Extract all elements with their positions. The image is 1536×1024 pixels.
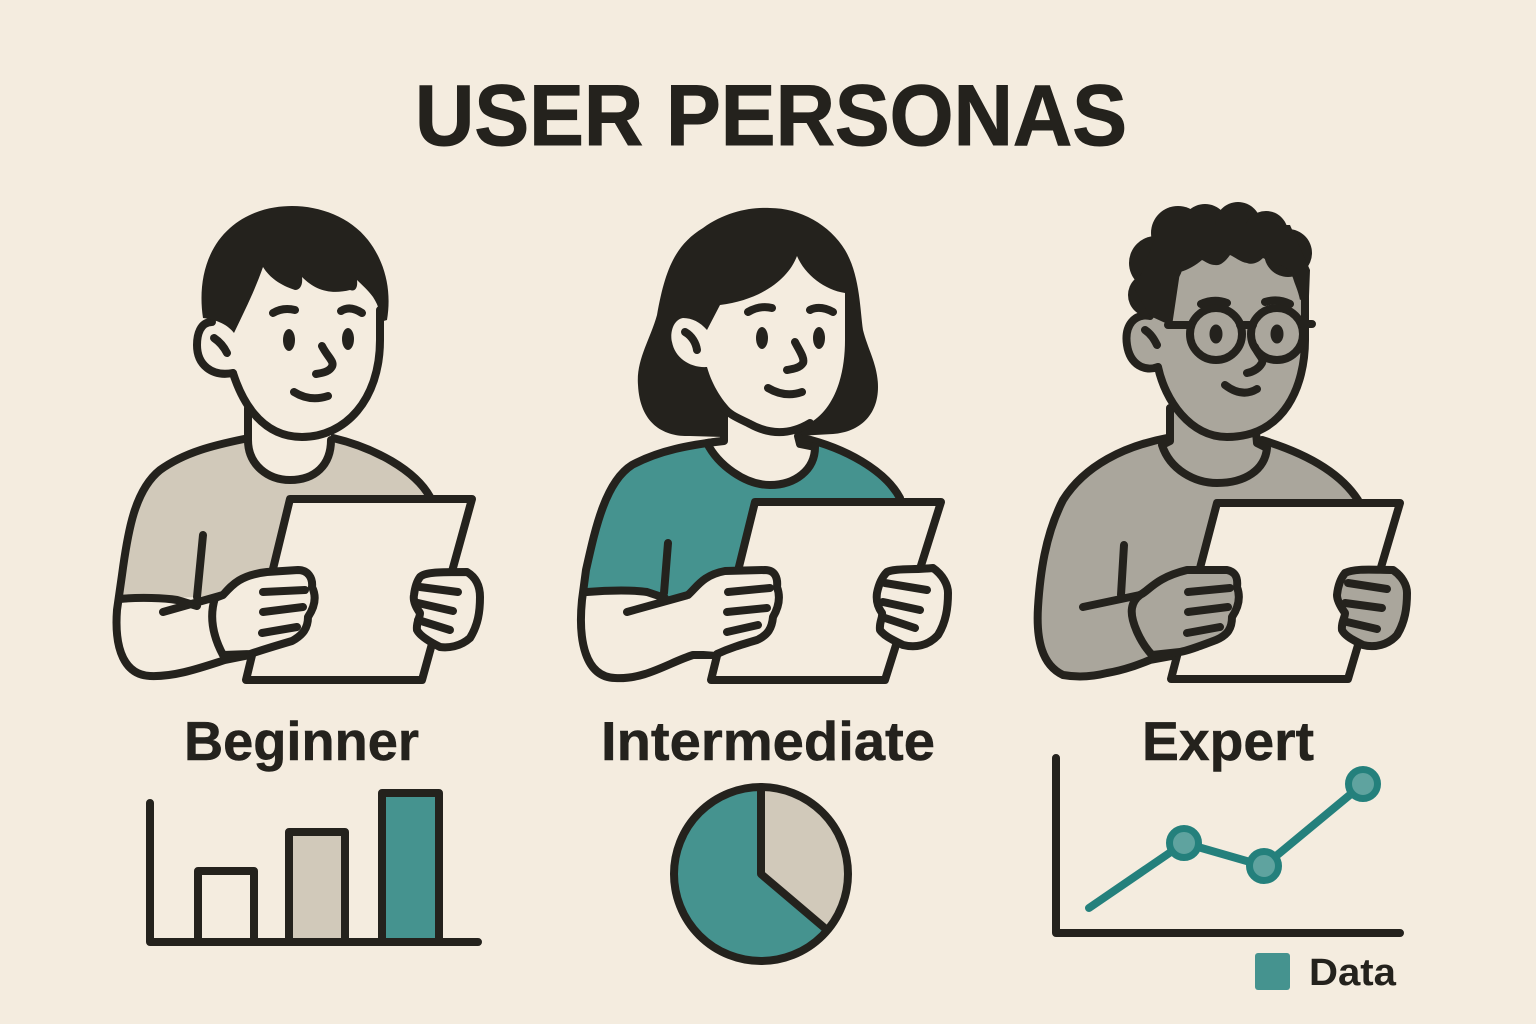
body bbox=[1038, 438, 1358, 676]
paper bbox=[246, 499, 472, 680]
arm and shoulder outline bbox=[117, 438, 430, 676]
neck and collar bbox=[1162, 405, 1267, 483]
left hand bbox=[1132, 570, 1239, 655]
right hand bbox=[877, 568, 948, 646]
hair bbox=[201, 206, 389, 333]
left hand bbox=[688, 570, 779, 652]
shirt bbox=[120, 438, 430, 600]
face and ear bbox=[671, 256, 845, 432]
pie chart bbox=[674, 787, 848, 961]
persona: expert bbox=[1038, 202, 1407, 679]
title: USER PERSONAS bbox=[415, 68, 1127, 164]
ear bbox=[197, 322, 240, 374]
label: Expert: Expert bbox=[1142, 710, 1314, 772]
facial features bbox=[273, 308, 362, 398]
bar chart bbox=[150, 793, 478, 942]
persona: intermediate bbox=[581, 208, 948, 680]
paper bbox=[711, 502, 941, 680]
label: Intermediate: Intermediate bbox=[601, 710, 935, 772]
right hand bbox=[414, 572, 480, 647]
face and ear bbox=[1127, 250, 1305, 437]
arm and shoulder outline bbox=[581, 438, 900, 678]
legend bbox=[1255, 952, 1397, 994]
facial features bbox=[1201, 300, 1290, 393]
face bbox=[215, 290, 380, 437]
right hand bbox=[1337, 570, 1407, 646]
paper bbox=[1171, 503, 1400, 679]
facial features bbox=[748, 307, 833, 394]
hair bbox=[1128, 202, 1312, 326]
glasses bbox=[1168, 308, 1312, 360]
hair bbox=[638, 208, 878, 437]
persona: beginner bbox=[117, 206, 480, 680]
legend: Data bbox=[1309, 952, 1397, 994]
line chart bbox=[1056, 758, 1400, 933]
left hand bbox=[212, 570, 315, 655]
label: Beginner: Beginner bbox=[184, 710, 419, 772]
neck and collar bbox=[707, 410, 815, 485]
neck and collar bbox=[248, 405, 331, 480]
shirt bbox=[584, 438, 900, 598]
